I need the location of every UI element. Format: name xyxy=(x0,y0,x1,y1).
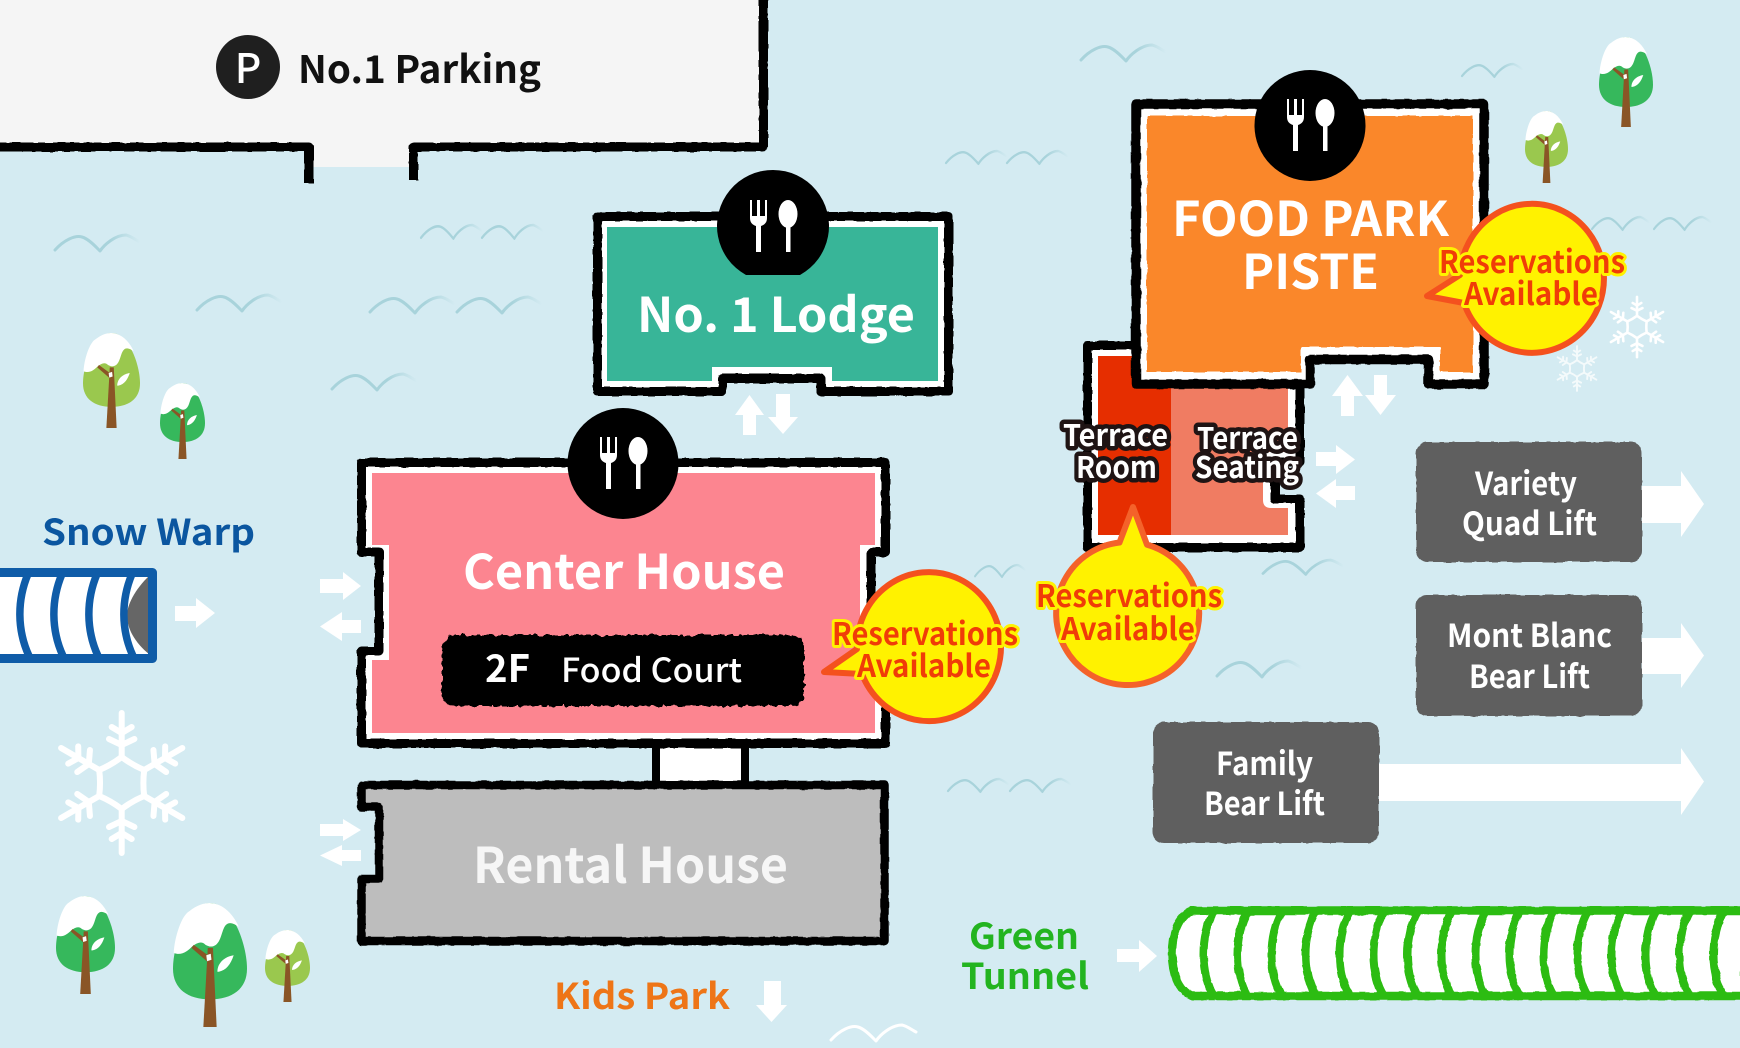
available word: Available xyxy=(1463,269,1598,314)
tunnel frame xyxy=(0,572,152,658)
speech bubble xyxy=(824,572,1001,721)
building outline xyxy=(598,216,948,392)
room word: Room xyxy=(1076,443,1157,487)
arrow: Kids Park direction xyxy=(756,981,787,1022)
building fill xyxy=(1147,116,1473,372)
tunnel end cap xyxy=(127,575,150,655)
arrow: Variety Quad Lift direction xyxy=(1642,471,1704,537)
label: Green Tunnel xyxy=(961,908,1089,1000)
icon: large snowflake xyxy=(50,713,194,853)
heading: Piste: PISTE xyxy=(1242,233,1379,303)
lift: Mont Blanc Bear Lift xyxy=(1416,595,1642,716)
connector between buildings xyxy=(656,744,745,785)
tunnel ribs and body xyxy=(1172,910,1740,996)
building fill xyxy=(372,473,875,733)
building shape xyxy=(362,785,884,941)
available word: Available xyxy=(1060,604,1195,649)
building outline xyxy=(362,462,886,744)
reservations word: Reservations xyxy=(832,609,1018,654)
lift name line 1: Family xyxy=(1216,739,1313,785)
food court badge xyxy=(442,635,804,706)
lift name line 2: Quad Lift xyxy=(1462,499,1597,545)
icon: tree 7 xyxy=(1525,111,1568,183)
icon: snowflake right xyxy=(1606,297,1668,357)
tunnel interior xyxy=(0,572,150,658)
food court label: Food Court xyxy=(561,644,742,692)
lift name line 2: Bear Lift xyxy=(1469,652,1590,698)
parking lot area xyxy=(0,0,764,167)
arrow: Family Bear Lift direction xyxy=(1379,748,1704,815)
lift name line 1: Mont Blanc xyxy=(1447,611,1612,657)
parking lot outline xyxy=(0,0,764,183)
label: Kids Park: Kids Park xyxy=(554,968,730,1020)
speech bubble xyxy=(1056,507,1199,685)
label: Terrace Seating xyxy=(1195,414,1299,487)
panel: Rental House xyxy=(362,785,884,941)
icon: tree 6 xyxy=(1599,37,1653,127)
Snow Warp tunnel xyxy=(0,572,152,658)
panel: Food Park Piste xyxy=(1136,70,1484,384)
arrow: Mont Blanc Bear Lift direction xyxy=(1642,623,1704,688)
arrow: Snow Warp direction xyxy=(175,598,215,628)
terrace seating fill xyxy=(1171,380,1288,535)
icon: tree 1 xyxy=(83,333,140,428)
heading: Food Park: FOOD PARK xyxy=(1172,180,1450,250)
green word: Green xyxy=(969,908,1079,960)
heading: No. 1 Lodge xyxy=(637,276,915,346)
panel: No.1 Parking xyxy=(0,0,764,183)
icon: fork and spoon xyxy=(1254,70,1366,181)
arrow: Green Tunnel direction xyxy=(1117,940,1157,972)
icon: tree 3 xyxy=(56,896,115,994)
parking label: No.1 Parking xyxy=(298,39,541,94)
icon: snowflake small xyxy=(1554,346,1600,391)
arrows: lodge entrance xyxy=(735,394,798,435)
building outline xyxy=(1136,104,1484,384)
icon: tree 5 xyxy=(265,930,310,1002)
arrows: terrace entrance xyxy=(1316,445,1355,508)
badge background xyxy=(442,635,804,706)
panel: Terrace building xyxy=(1088,346,1300,548)
heading: Center House xyxy=(463,533,785,603)
tunnel word: Tunnel xyxy=(961,948,1089,1000)
icon: tree 2 xyxy=(160,383,205,459)
arrows: center house entrance xyxy=(320,572,361,641)
lift box xyxy=(1416,442,1642,562)
available word: Available xyxy=(856,641,991,686)
heading: Rental House xyxy=(473,827,788,898)
icon: parking P xyxy=(216,35,280,99)
arrows: rental house entrance xyxy=(320,819,361,866)
reservations word: Reservations xyxy=(1439,237,1625,282)
panel: No. 1 Lodge xyxy=(598,170,948,392)
icon: parking P: P xyxy=(235,35,261,95)
terrace word: Terrace xyxy=(1063,411,1168,455)
lift: Family Bear Lift xyxy=(1153,722,1379,843)
label: Terrace Room xyxy=(1063,411,1168,487)
floor label: 2F xyxy=(485,638,530,693)
lift name line 1: Variety xyxy=(1474,459,1577,505)
building fill xyxy=(607,227,938,381)
icon: fork and spoon xyxy=(717,170,829,275)
lift: Variety Quad Lift xyxy=(1416,442,1642,562)
icon: tree 4 xyxy=(173,903,247,1027)
callout: Food Park reservations xyxy=(1427,204,1625,353)
terrace word: Terrace xyxy=(1197,414,1298,458)
icon: fork and spoon xyxy=(568,408,678,519)
seating word: Seating xyxy=(1195,443,1299,487)
label: Snow Warp: Snow Warp xyxy=(42,504,255,556)
lift box xyxy=(1153,722,1379,843)
speech bubble xyxy=(1427,204,1604,353)
reservations word: Reservations xyxy=(1036,571,1222,616)
callout: Center House reservations xyxy=(824,572,1018,721)
lift name line 2: Bear Lift xyxy=(1204,779,1325,825)
tunnel ribs xyxy=(20,574,133,656)
terrace room fill xyxy=(1098,356,1171,535)
callout: Terrace reservations xyxy=(1036,507,1222,685)
Green Tunnel xyxy=(1172,910,1740,996)
lift box xyxy=(1416,595,1642,716)
panel: Center House xyxy=(362,408,886,744)
arrows: food park entrance xyxy=(1332,375,1396,416)
terrace outline xyxy=(1088,346,1300,548)
